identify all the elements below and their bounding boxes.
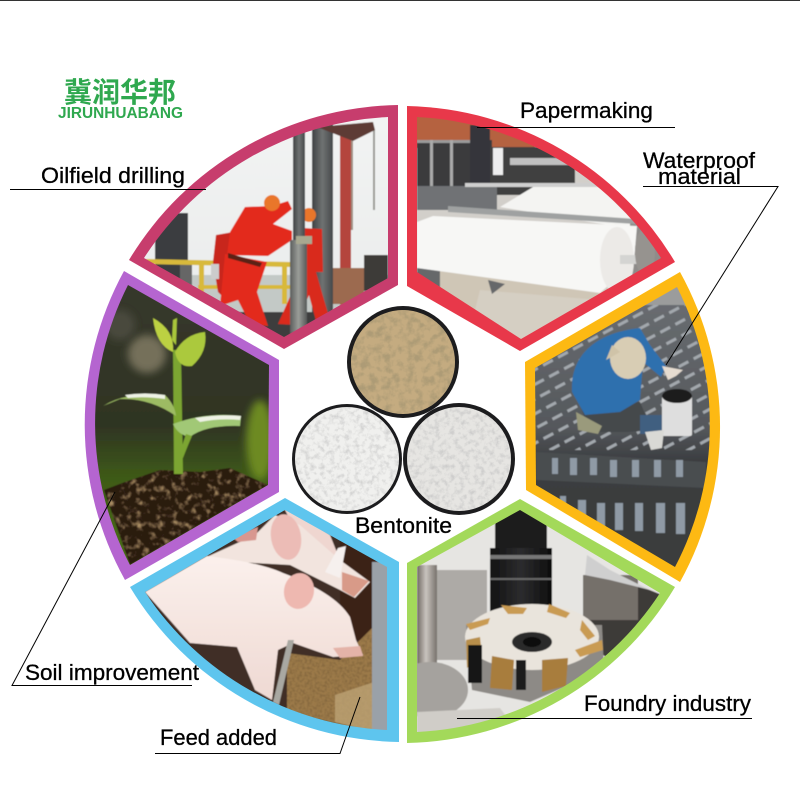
label: Papermaking: Papermaking: [520, 98, 653, 123]
membrane logo marks: [552, 458, 685, 534]
label: Waterproof material: Waterproof: [643, 148, 756, 173]
panel: papermaking: [407, 106, 675, 351]
top border line: [0, 0, 800, 1]
label: Soil improvement: Soil improvement: [25, 660, 199, 685]
panel: oilfield drilling: [129, 105, 400, 349]
label: Oilfield drilling: Oilfield drilling: [41, 163, 185, 188]
sample: off-white powder dish: [403, 403, 515, 515]
photo: paper machine: [417, 117, 661, 339]
panel: feed added: [130, 498, 399, 742]
panel: foundry industry: [392, 499, 675, 743]
label: Foundry industry: Foundry industry: [584, 691, 751, 716]
label: Feed added: [155, 697, 360, 754]
logo: JIRUNHUABANG: [58, 105, 183, 122]
label: Soil improvement: [12, 492, 199, 686]
logo: 冀润华邦: [64, 77, 176, 108]
panel: waterproof material: [525, 272, 720, 582]
photo: oilfield workers: [144, 117, 388, 337]
photo: seedling in soil: [90, 280, 275, 570]
logo: [58, 77, 183, 122]
label: Waterproof material: material: [658, 164, 741, 189]
photo: pigs at feed trough: [145, 510, 387, 730]
photo: worker on waterproof roof: [530, 280, 710, 575]
label: Feed added: Feed added: [160, 725, 277, 750]
center label: Bentonite: Bentonite: [355, 513, 452, 538]
sample: white powder dish: [292, 404, 402, 514]
label: Waterproof material: [643, 148, 778, 365]
bentonite samples: [292, 306, 515, 515]
panel: soil improvement: [85, 271, 279, 580]
sample: tan powder dish: [347, 306, 459, 418]
photo: milling cutter tools: [417, 510, 660, 732]
